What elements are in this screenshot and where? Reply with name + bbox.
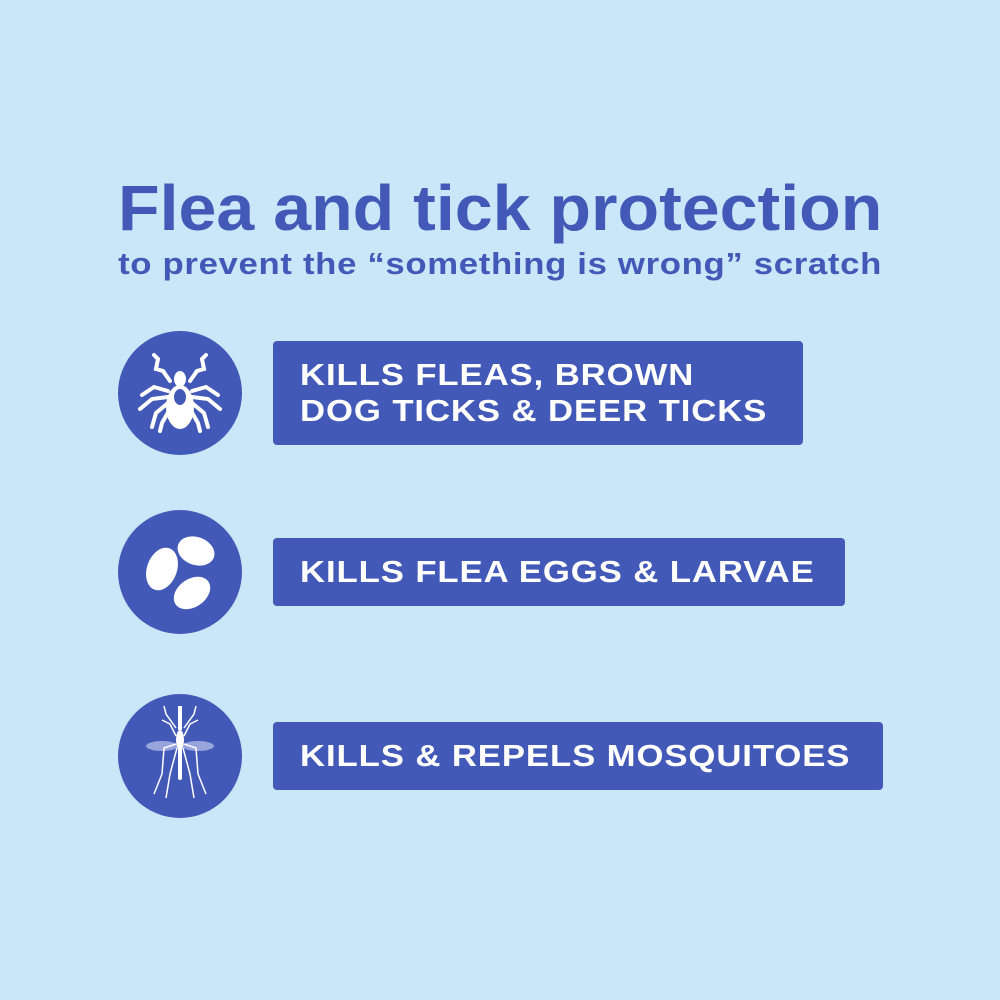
title: Flea and tick protection bbox=[118, 172, 882, 244]
box: mosquitoes: KILLS & REPELS MOSQUITOES bbox=[300, 738, 850, 773]
box: kills flea eggs bbox=[273, 538, 845, 606]
icon: eggs bbox=[118, 510, 242, 634]
box: kills flea eggs: KILLS FLEA EGGS & LARVAE bbox=[300, 554, 815, 589]
box: mosquitoes bbox=[273, 722, 883, 790]
icon: mosquito bbox=[118, 694, 242, 818]
box: kills fleas and ticks: DOG TICKS & DEER TICKS bbox=[300, 393, 767, 428]
icon: tick bbox=[118, 331, 242, 455]
box: kills fleas and ticks: KILLS FLEAS, BROWN bbox=[300, 357, 694, 392]
subtitle: to prevent the “something is wrong” scratch bbox=[118, 246, 882, 281]
box: kills fleas and ticks bbox=[273, 341, 803, 445]
